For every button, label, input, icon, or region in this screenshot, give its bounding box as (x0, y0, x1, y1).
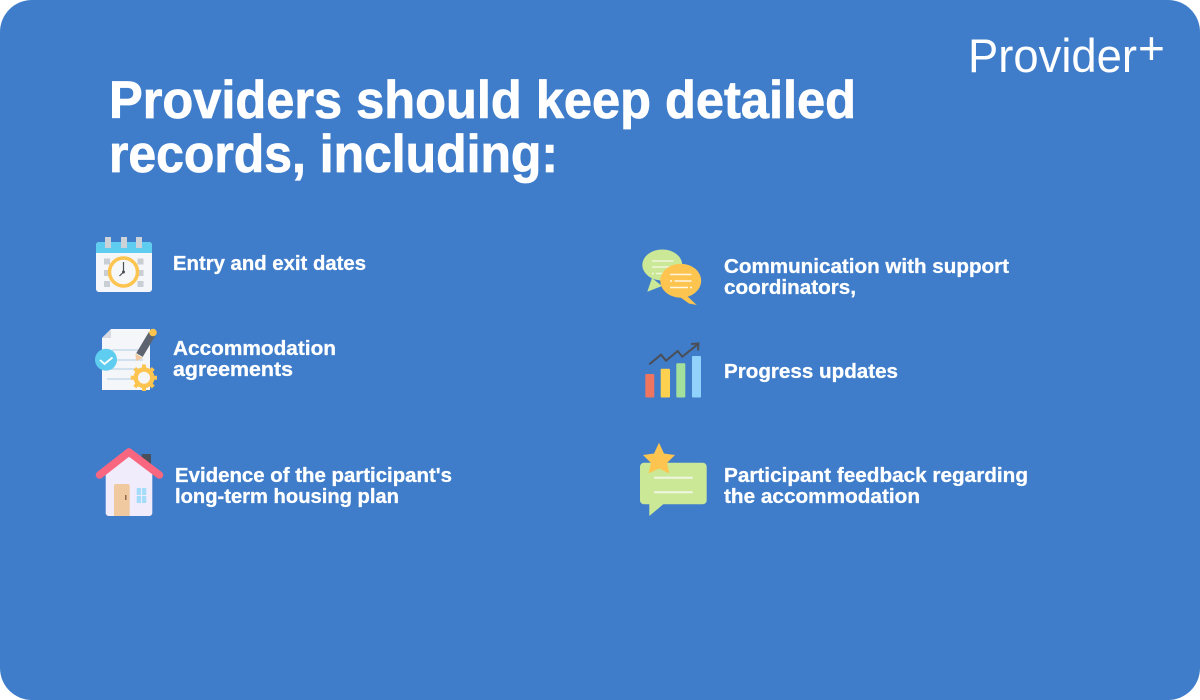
label (175, 464, 452, 508)
label: coordinators, (724, 276, 856, 299)
icon: house (100, 452, 160, 516)
label: Progress updates (724, 360, 898, 383)
icon: chat bubbles (642, 250, 701, 305)
label: the accommodation (724, 485, 920, 508)
logo: Provider+: Provider (968, 29, 1137, 82)
label: Participant feedback regarding (724, 464, 1028, 487)
label: long-term housing plan (175, 485, 399, 508)
item: long-term housing plan (100, 452, 452, 516)
label: Entry and exit dates (173, 252, 366, 275)
item: communication with support coordinators (642, 250, 1009, 305)
item: entry and exit dates (96, 237, 366, 292)
icon: calendar with clock (96, 237, 152, 292)
icon: document with pencil, check and gear (95, 329, 157, 391)
label (724, 255, 1009, 299)
title (109, 71, 856, 184)
label: Accommodation (173, 337, 336, 360)
label: Communication with support (724, 255, 1009, 278)
label: Evidence of the participant's (175, 464, 452, 487)
item: participant feedback (640, 443, 1028, 516)
title: records, including: (109, 125, 558, 184)
label (173, 337, 336, 381)
item: accommodation agreements (95, 329, 336, 391)
label (724, 464, 1028, 508)
item: progress updates (645, 344, 898, 398)
icon: bar chart with rising arrow (645, 344, 701, 398)
label: agreements (173, 358, 293, 381)
logo: Provider+: + (1138, 22, 1165, 74)
title: Providers should keep detailed (109, 71, 856, 130)
icon: speech bubble with star (640, 443, 707, 516)
